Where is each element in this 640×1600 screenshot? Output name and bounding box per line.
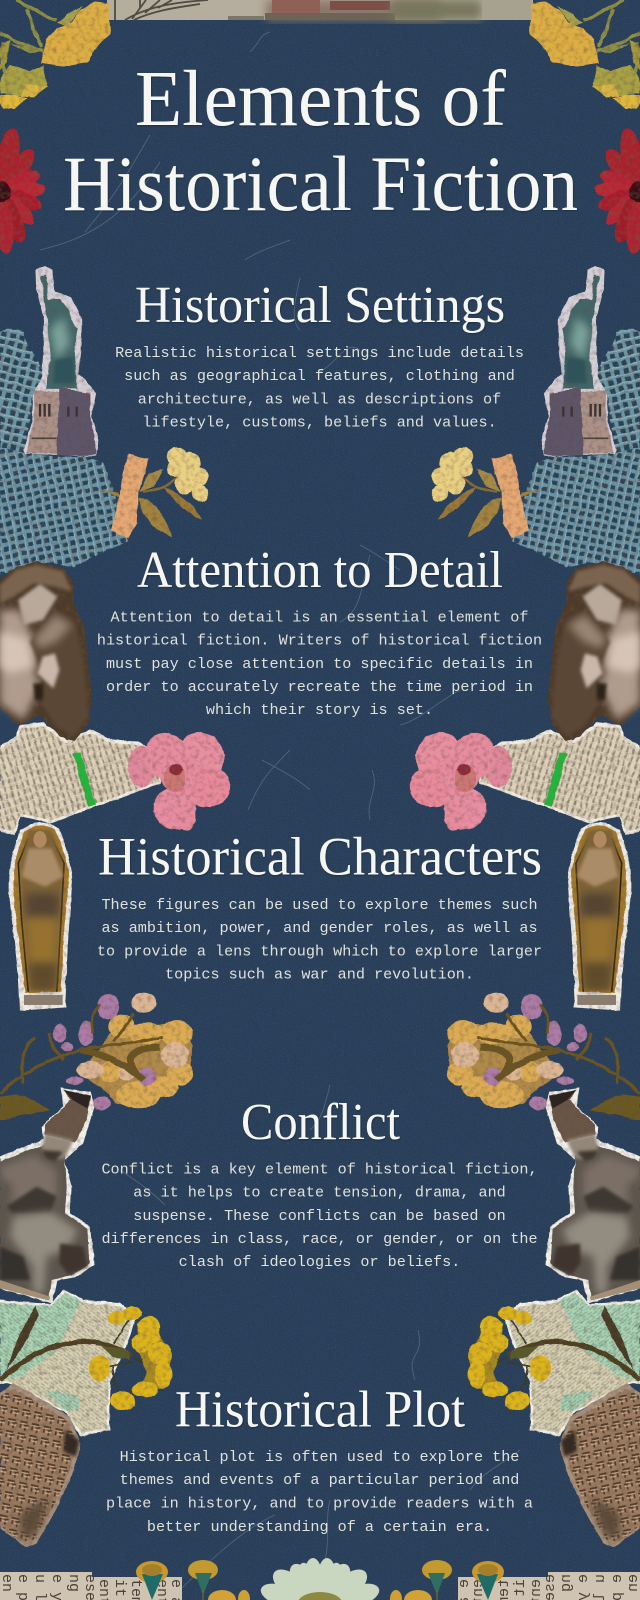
text block: Realistic historical settings include details <box>115 344 524 362</box>
orange tape <box>111 453 148 538</box>
blossom three <box>208 1590 250 1600</box>
text block: Attention to detail is an essential element of <box>111 608 528 626</box>
title: Historical Fiction <box>63 140 578 227</box>
icon: stem and yellow blossoms left <box>0 1305 172 1410</box>
icon: pressed yellow flower top left <box>0 0 111 109</box>
text block: differences in class, race, or gender, or on the <box>101 1230 538 1248</box>
icon: David statue bust right <box>548 561 640 741</box>
central flower mass <box>80 1023 192 1107</box>
heading: Conflict <box>241 1094 401 1151</box>
panel: Historical Settings <box>115 277 524 431</box>
text block: which their story is set. <box>206 701 433 719</box>
icon: sarcophagus cutout left <box>9 822 73 1011</box>
icon: pressed yellow flower top right <box>529 0 640 109</box>
yellow flower head <box>167 447 209 502</box>
text block: themes and events of a particular period and <box>120 1471 519 1489</box>
heading: Attention to Detail <box>137 542 503 599</box>
title <box>63 56 578 227</box>
text block: Conflict is a key element of historical fiction, <box>101 1160 538 1178</box>
text block: order to accurately recreate the time period in <box>106 678 533 696</box>
text block: place in history, and to provide readers with a <box>106 1494 533 1512</box>
blossom one <box>136 1561 168 1600</box>
text block: must pay close attention to specific details in <box>106 655 533 673</box>
title: Elements of <box>135 56 507 143</box>
panel: Historical Characters <box>97 826 542 983</box>
panel: Historical Plot <box>106 1382 533 1536</box>
icon: pink flower right <box>409 732 512 831</box>
text block: lifestyle, customs, beliefs and values. <box>142 413 497 431</box>
heading: Historical Plot <box>175 1382 466 1439</box>
blossom two <box>188 1560 218 1600</box>
text block: such as geographical features, clothing and <box>124 367 515 385</box>
text block: suspense. These conflicts can be based on <box>133 1207 506 1225</box>
heading: Historical Settings <box>135 277 505 334</box>
icon: stem and yellow blossoms right <box>468 1305 640 1410</box>
text block: topics such as war and revolution. <box>165 965 474 983</box>
icon: dried flower branch left <box>0 993 193 1120</box>
icon: newspaper strip bottom left <box>0 1572 184 1600</box>
icon: torn book page left <box>0 723 167 835</box>
icon: clay tablet left <box>0 1383 81 1548</box>
icon: burlap mesh left <box>0 328 128 575</box>
heading: Historical Characters <box>98 826 542 886</box>
text block: These figures can be used to explore themes such <box>101 896 538 914</box>
icon: small yellow blossoms bottom right <box>390 1560 504 1600</box>
icon: pink flower left <box>128 732 231 831</box>
icon: white daisy bottom center <box>258 1558 382 1600</box>
panel: Conflict <box>101 1094 538 1271</box>
text block: better understanding of a certain era. <box>147 1518 492 1536</box>
icon: orange tape with dried flower right <box>431 447 542 538</box>
top photo strip with bridge and buildings <box>107 0 533 20</box>
icon: red flower left <box>0 126 46 255</box>
icon: pale map scrap left <box>0 1289 136 1436</box>
icon: red flower right <box>594 126 640 255</box>
text block: historical fiction. Writers of historical fiction <box>97 631 542 649</box>
icon: warrior statue cutout left <box>0 1087 95 1304</box>
icon: newspaper strip bottom right <box>456 1572 640 1600</box>
icon: torn book page right <box>473 723 640 835</box>
text block: to provide a lens through which to explore larger <box>97 942 542 960</box>
icon: sarcophagus cutout right <box>567 822 631 1011</box>
text block: as it helps to create tension, drama, and <box>133 1184 506 1202</box>
icon: Statue of Liberty cutout left <box>23 266 98 456</box>
text block: Historical plot is often used to explore the <box>120 1448 519 1466</box>
text block: clash of ideologies or beliefs. <box>179 1253 460 1271</box>
text block: architecture, as well as descriptions of <box>138 390 501 408</box>
icon: Statue of Liberty cutout right <box>542 266 617 456</box>
icon: dried flower branch right <box>447 993 640 1120</box>
text block: as ambition, power, and gender roles, as well as <box>101 919 538 937</box>
icon: warrior statue cutout right <box>545 1087 640 1304</box>
panel: Attention to Detail <box>97 542 542 719</box>
icon: orange tape with dried flower left <box>98 447 209 538</box>
green highlighter stripe <box>73 752 96 807</box>
icon: clay tablet right <box>559 1383 640 1548</box>
icon: small yellow blossoms bottom left <box>136 1560 250 1600</box>
icon: David statue bust left <box>0 561 92 741</box>
icon: burlap mesh right <box>512 328 640 575</box>
icon: pale map scrap right <box>504 1289 640 1436</box>
